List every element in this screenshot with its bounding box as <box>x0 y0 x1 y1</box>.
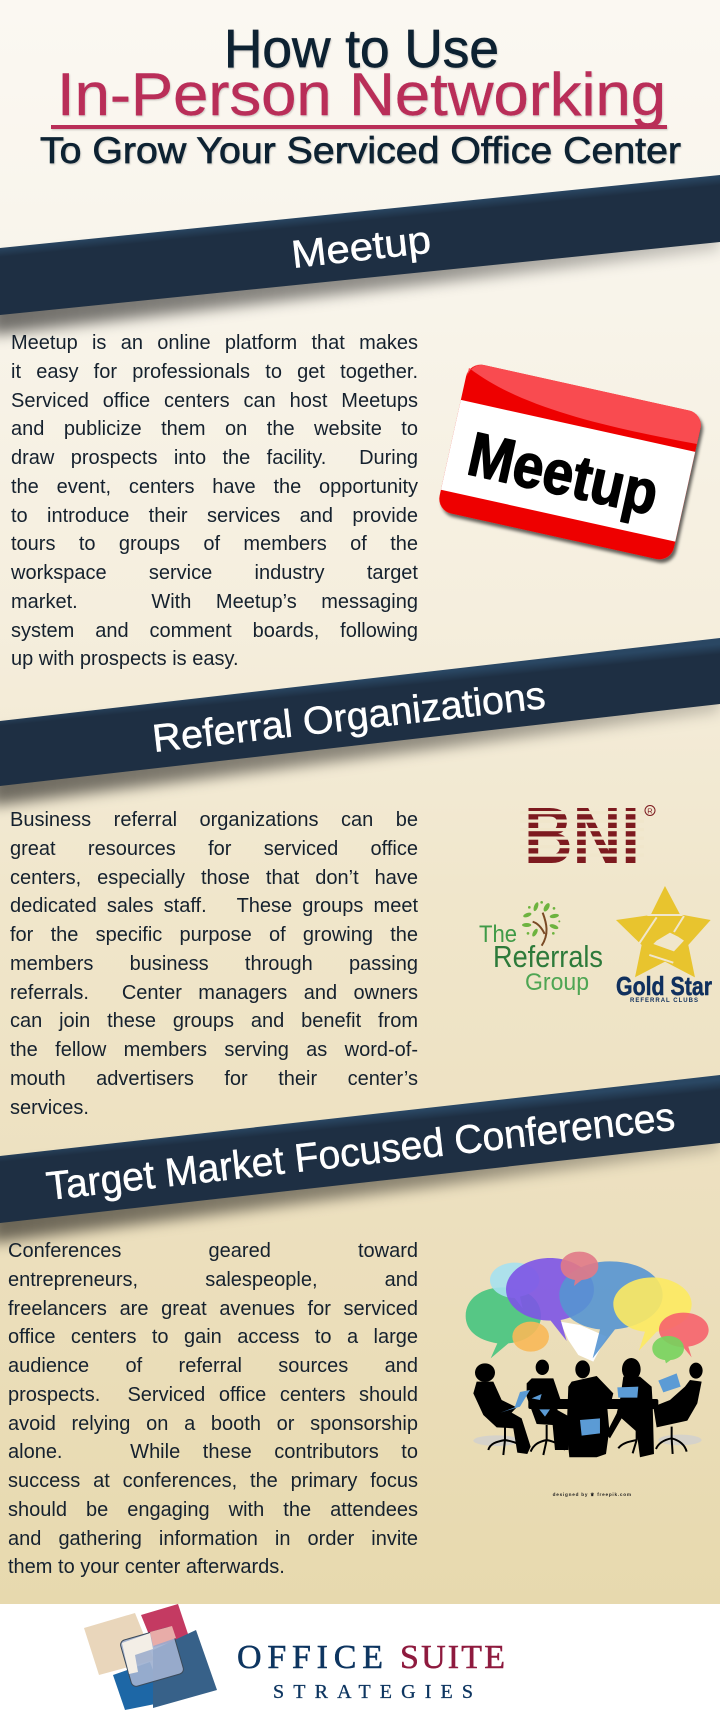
text block: Meetup description: Meetup is an online platform that makes <box>11 332 418 354</box>
logo: The Referrals Group: Referrals <box>493 939 603 974</box>
logo: BNI: BNI <box>524 791 640 880</box>
logo squares <box>84 1604 217 1710</box>
text block: Meetup description: it easy for professionals to get together. <box>11 361 418 383</box>
text block: Meetup description: up with prospects is easy. <box>11 648 239 670</box>
text block: Referral Organizations description: for the specific purpose of growing the <box>10 924 418 946</box>
title <box>40 19 681 171</box>
office chairs <box>488 1425 687 1455</box>
text block: Referral Organizations description: members business through passing <box>10 953 418 975</box>
title: In-Person Networking <box>57 61 666 128</box>
text block: Referral Organizations description: dedicated sales staff. These groups meet <box>10 895 418 917</box>
banner: Meetup: Meetup <box>289 219 433 277</box>
logo: The Referrals Group: The <box>479 921 517 948</box>
text block: Referral Organizations description: centers, especially those that don’t have <box>10 866 418 888</box>
icon: Meetup name tag: Meetup <box>462 420 664 529</box>
text block: Conferences description: audience of referral sources and <box>8 1355 418 1377</box>
logo: The Referrals Group <box>479 901 603 996</box>
text block: Referral Organizations description: Business referral organizations can be <box>10 809 418 831</box>
footer logo: Office Suite Strategies: SUITE <box>400 1639 505 1676</box>
text block: Conferences description: office centers to gain access to a large <box>8 1326 418 1348</box>
banner: Referral Organizations <box>0 638 720 806</box>
text block: Meetup description: to introduce their services and provide <box>11 504 418 526</box>
illustration: meeting silhouettes with speech bubbles <box>466 1252 709 1497</box>
text block: Conferences description: them to your center afterwards. <box>8 1556 285 1578</box>
footer logo: Office Suite Strategies: STRATEGIES <box>273 1681 473 1703</box>
text block: Conferences description: should be engaging with the attendees <box>8 1499 418 1521</box>
text block: Referral Organizations description <box>10 809 418 1118</box>
text block: Meetup description: the event, centers have the opportunity <box>11 476 418 498</box>
text block: Meetup description: and publicize them on the website to <box>11 418 418 440</box>
text block: Referral Organizations description: can join these groups and benefit from <box>10 1010 418 1032</box>
logo: BNI: R <box>647 806 653 816</box>
text block: Conferences description: freelancers are great avenues for serviced <box>8 1298 418 1320</box>
banner: Target Market Focused Conferences <box>0 1075 720 1243</box>
text block: Conferences description: Conferences geared toward <box>8 1240 418 1262</box>
text block: Referral Organizations description: great resources for serviced office <box>10 838 418 860</box>
image credit: designed by ♛ freepik.com <box>553 1492 631 1497</box>
text block: Meetup description: Serviced office centers can host Meetups <box>11 390 418 412</box>
footer logo: Office Suite Strategies: OFFICE <box>237 1639 383 1676</box>
banner: Referral Organizations: Referral Organizations <box>150 674 548 761</box>
footer logo: Office Suite Strategies <box>84 1604 505 1710</box>
text block: Conferences description: success at conferences, the primary focus <box>8 1470 418 1492</box>
title: To Grow Your Serviced Office Center <box>40 130 681 171</box>
icon: Meetup name tag <box>436 362 704 562</box>
white splash behind bubbles <box>560 1322 607 1362</box>
logo: Gold Star Referral Clubs <box>616 886 712 1004</box>
logo: The Referrals Group: Group <box>525 969 589 996</box>
text block: Conferences description: entrepreneurs, salespeople, and <box>8 1269 418 1291</box>
devices and books <box>501 1373 681 1436</box>
text block: Meetup description <box>11 332 418 670</box>
text block: Referral Organizations description: referrals. Center managers and owners <box>10 982 418 1004</box>
text block: Meetup description: market. With Meetup’s messaging <box>11 591 418 613</box>
text block: Conferences description: and gathering information in order invite <box>8 1528 418 1550</box>
text block: Meetup description: workspace service industry target <box>11 562 418 584</box>
text block: Conferences description: alone. While these contributors to <box>8 1441 418 1463</box>
banner: Target Market Focused Conferences: Target Market Focused Conferences <box>44 1095 677 1209</box>
logo: Gold Star Referral Clubs: REFERRAL CLUBS <box>630 998 698 1004</box>
text block: Conferences description: prospects. Serviced office centers should <box>8 1384 418 1406</box>
text block: Conferences description: avoid relying on a booth or sponsorship <box>8 1412 418 1434</box>
text block: Referral Organizations description: services. <box>10 1096 89 1118</box>
title: How to Use <box>224 19 499 79</box>
text block: Meetup description: tours to groups of members of the <box>11 533 418 555</box>
text block: Meetup description: system and comment boards, following <box>11 620 418 642</box>
floor shadows <box>473 1435 702 1446</box>
text block: Conferences description <box>8 1240 418 1578</box>
text block: Referral Organizations description: the fellow members serving as word-of- <box>10 1039 418 1061</box>
people and table <box>473 1358 703 1457</box>
text block: Meetup description: draw prospects into the facility. During <box>11 447 418 469</box>
banner: Meetup <box>0 175 720 335</box>
text block: Referral Organizations description: mouth advertisers for their center’s <box>10 1068 418 1090</box>
speech bubbles <box>466 1252 709 1363</box>
